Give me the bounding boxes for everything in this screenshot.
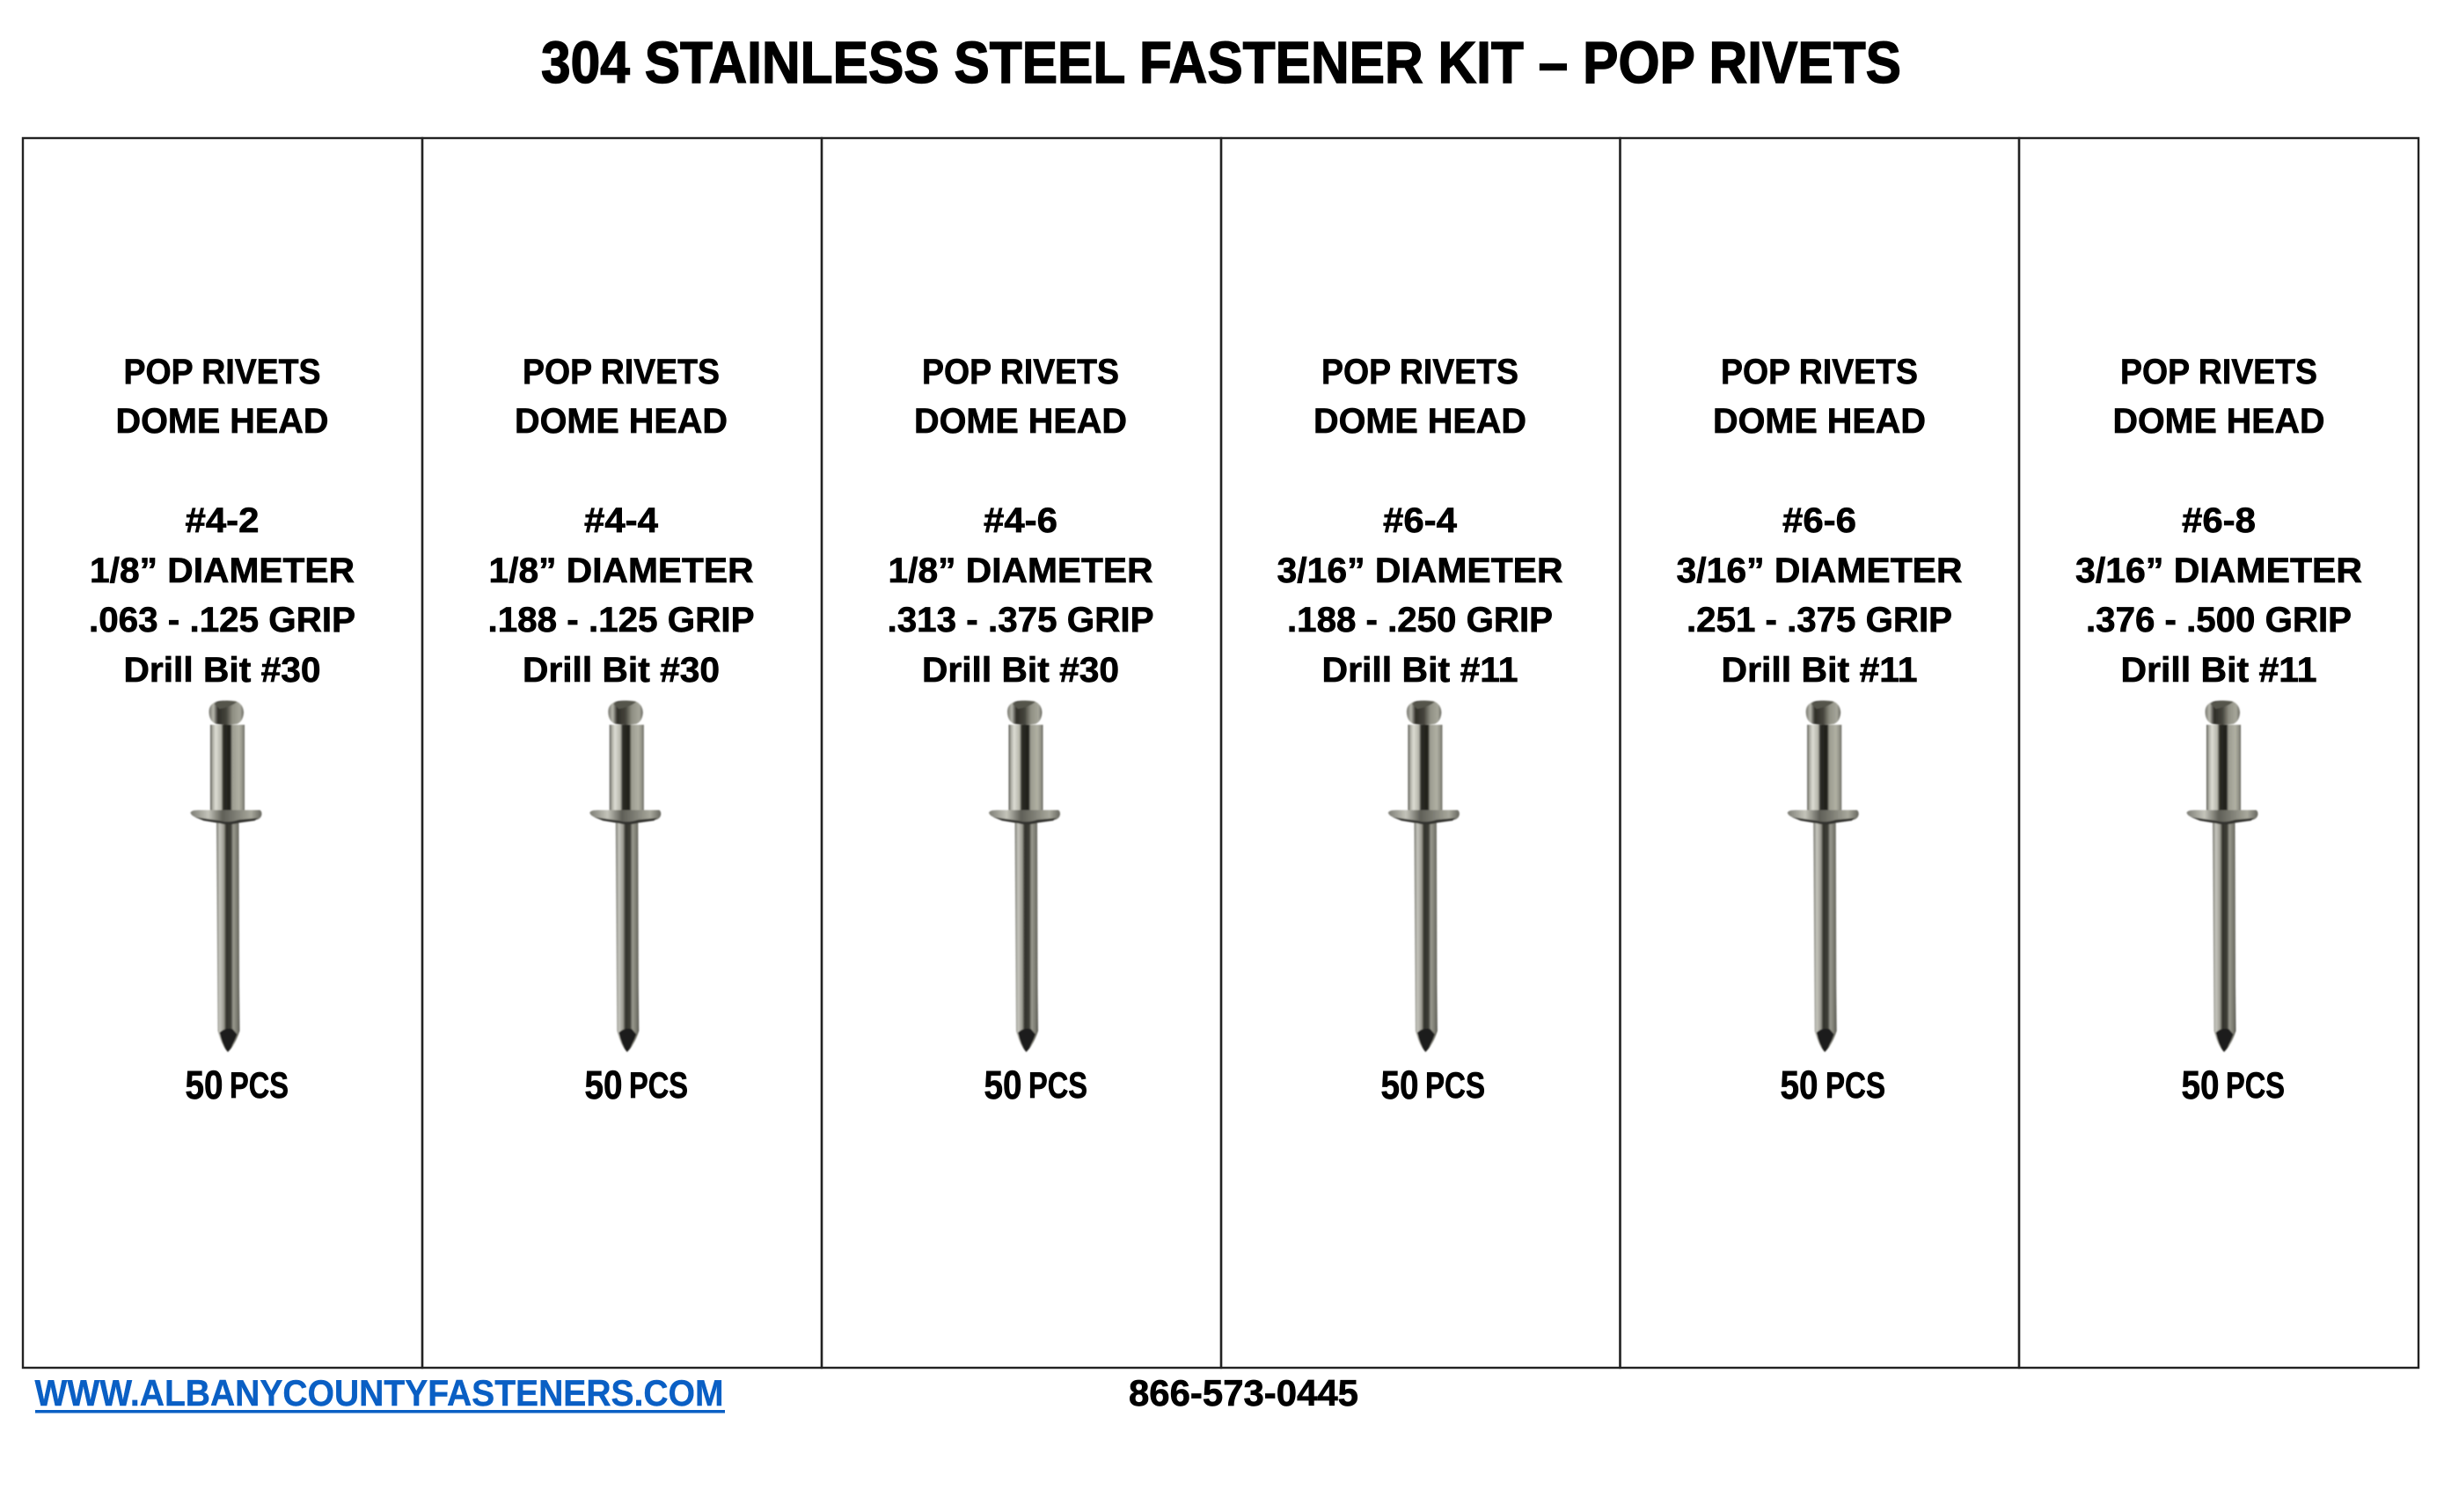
specs: #4-2: #4-2 (185, 501, 259, 540)
specs: #4-6: 1/8” DIAMETER (889, 551, 1153, 590)
heading: product name (2113, 353, 2324, 441)
panel: rivet #4-4 (422, 138, 822, 1368)
quantity label: PCS (629, 1064, 688, 1106)
specs: #4-2: .063 - .125 GRIP (89, 601, 355, 639)
icon: rivet photo (190, 700, 262, 1052)
icon: rivet photo (989, 700, 1060, 1052)
quantity label: PCS (230, 1064, 289, 1106)
specs: #4-2: 1/8” DIAMETER (90, 551, 355, 590)
quantity label: 50 (2182, 1063, 2219, 1107)
icon: rivet photo (589, 700, 661, 1052)
quantity label (1381, 1063, 1485, 1107)
heading: product name: POP RIVETS (922, 353, 1119, 391)
panel: rivet #4-2 (23, 138, 422, 1368)
quantity label: PCS (1826, 1064, 1885, 1106)
specs: #6-6: #6-6 (1782, 501, 1856, 540)
heading: product name: POP RIVETS (1721, 353, 1918, 391)
quantity label: PCS (1425, 1064, 1485, 1106)
heading: product name: DOME HEAD (2113, 402, 2324, 441)
title: 304 STAINLESS STEEL FASTENER KIT – POP RIVETS (541, 30, 1901, 96)
specs: #6-6: Drill Bit #11 (1721, 651, 1918, 690)
specs: #6-6: .251 - .375 GRIP (1687, 601, 1952, 639)
specs: #4-4 (487, 501, 755, 690)
phone number: 866-573-0445 (1129, 1372, 1358, 1413)
specs: #4-2 (89, 501, 355, 690)
specs: #6-4: #6-4 (1383, 501, 1458, 540)
specs: #4-4: 1/8” DIAMETER (489, 551, 754, 590)
icon: rivet photo (1788, 700, 1859, 1052)
specs: #6-4 (1277, 501, 1563, 690)
specs: #4-6 (887, 501, 1154, 690)
specs: #6-8 (2075, 501, 2362, 690)
website link: WWW.ALBANYCOUNTYFASTENERS.COM (35, 1372, 723, 1413)
quantity label: PCS (2226, 1064, 2285, 1106)
heading: product name: POP RIVETS (1321, 353, 1518, 391)
quantity label (185, 1063, 289, 1107)
quantity label: PCS (1028, 1064, 1087, 1106)
heading: product name (914, 353, 1127, 441)
quantity label (2182, 1063, 2285, 1107)
specs: #6-8: #6-8 (2182, 501, 2256, 540)
specs: #4-4: Drill Bit #30 (523, 651, 720, 690)
panel: rivet #4-6 (822, 138, 1221, 1368)
specs: #4-2: Drill Bit #30 (123, 651, 320, 690)
quantity label (1781, 1063, 1885, 1107)
specs: #6-4: .188 - .250 GRIP (1287, 601, 1553, 639)
specs: #6-4: 3/16” DIAMETER (1277, 551, 1563, 590)
icon: rivet photo (1388, 700, 1460, 1052)
specs: #6-4: Drill Bit #11 (1321, 651, 1518, 690)
heading: product name: DOME HEAD (1313, 402, 1526, 441)
heading: product name: POP RIVETS (2120, 353, 2317, 391)
heading: product name (1313, 353, 1526, 441)
heading: product name: DOME HEAD (116, 402, 329, 441)
specs: #4-4: .188 - .125 GRIP (487, 601, 755, 639)
quantity label: 50 (1381, 1063, 1418, 1107)
panel: rivet #6-4 (1221, 138, 1621, 1368)
specs: #6-6 (1677, 501, 1963, 690)
quantity label (584, 1063, 688, 1107)
heading: product name (515, 353, 728, 441)
specs: #6-8: .376 - .500 GRIP (2086, 601, 2352, 639)
heading: product name: DOME HEAD (515, 402, 728, 441)
quantity label (984, 1063, 1087, 1107)
quantity label: 50 (984, 1063, 1022, 1107)
specs: #6-8: Drill Bit #11 (2120, 651, 2317, 690)
heading: product name (1713, 353, 1926, 441)
icon: rivet photo (2187, 700, 2257, 1052)
specs: #4-6: #4-6 (984, 501, 1057, 540)
heading: product name: POP RIVETS (523, 353, 720, 391)
specs: #4-6: .313 - .375 GRIP (887, 601, 1154, 639)
quantity label: 50 (584, 1063, 623, 1107)
panel: rivet #6-6 (1621, 138, 2019, 1368)
heading: product name: POP RIVETS (123, 353, 320, 391)
panel: rivet #6-8 (2019, 138, 2418, 1368)
specs: #6-8: 3/16” DIAMETER (2075, 551, 2362, 590)
heading: product name: DOME HEAD (1713, 402, 1926, 441)
specs: #4-4: #4-4 (584, 501, 659, 540)
specs: #4-6: Drill Bit #30 (922, 651, 1119, 690)
quantity label: 50 (1781, 1063, 1818, 1107)
heading: product name (116, 353, 329, 441)
quantity label: 50 (185, 1063, 223, 1107)
specs: #6-6: 3/16” DIAMETER (1677, 551, 1963, 590)
heading: product name: DOME HEAD (914, 402, 1127, 441)
